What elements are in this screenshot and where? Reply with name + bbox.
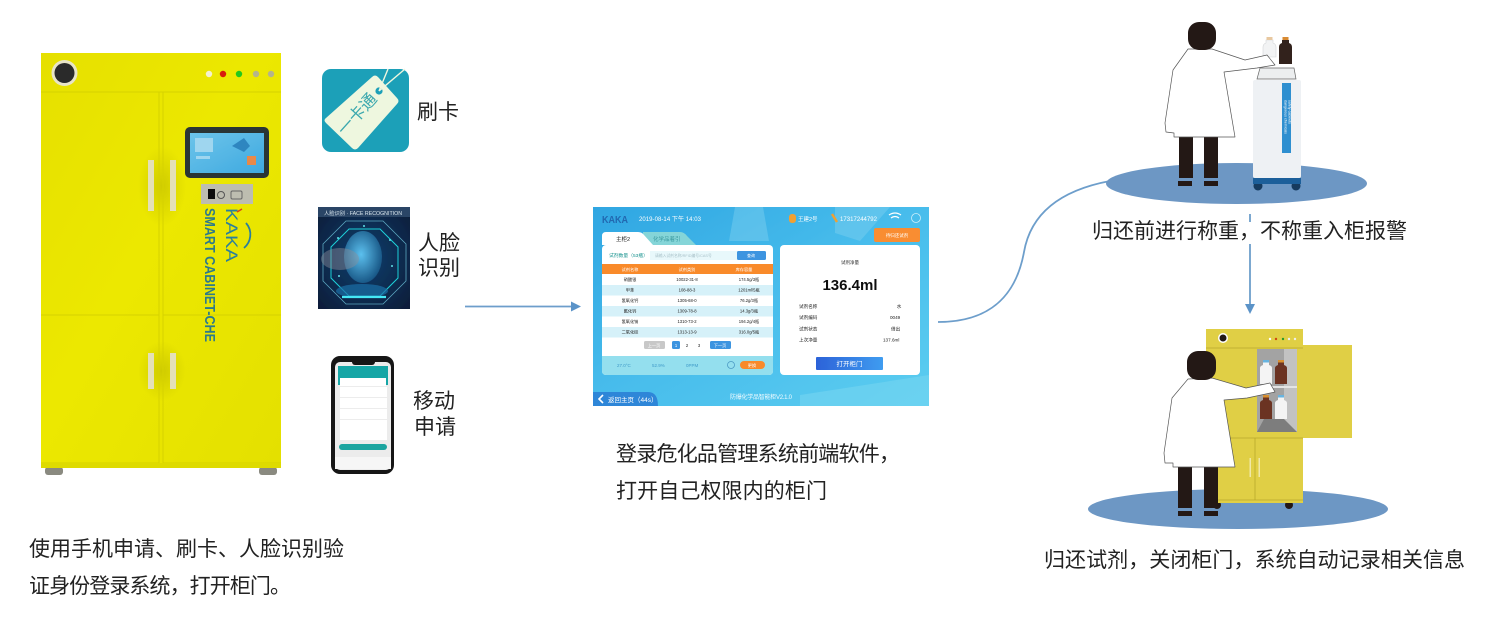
label: face recognition: 人脸 [418,232,460,255]
caption: step two [616,443,900,503]
reagent table panel: 14.3g/3瓶 [740,308,758,314]
label: mobile application [413,390,456,439]
reagent detail panel: 试剂净量 [841,259,859,266]
label: swipe card: 刷卡 [417,101,459,124]
header bar: 17317244792 [840,217,878,223]
reagent table panel: 查询 [747,252,755,258]
reagent table panel: 库存容量 [736,266,752,273]
icon: campus card tag [322,69,409,152]
icon: mobile phone app [331,356,394,474]
reagent table panel: 27.0°C [617,363,632,368]
reagent table panel: 0PPM [686,363,699,368]
caption: step four: 归还试剂，关闭柜门，系统自动记录相关信息 [1044,549,1465,572]
reagent table panel: 试剂数量（53瓶） [609,252,648,259]
reagent table panel: 下一页 [714,343,726,349]
back button [593,392,658,406]
weighing cabinet with scale [1253,37,1301,190]
yellow smart cabinet [41,53,281,475]
reagent table panel: 1310-73-2 [677,319,697,324]
reagent table panel: 甲苯 [626,286,635,294]
reagent table panel: 2 [686,343,689,348]
reagent table panel: 更换 [748,362,757,369]
reagent table panel: 试剂类别 [679,266,695,273]
reagent table panel: 1 [675,343,678,348]
label: mobile application: 移动 [413,390,455,413]
yellow smart cabinet: KAKA [222,208,241,263]
reagent table panel: 氢氧化钙 [622,297,639,304]
reagent table panel: 1201ml/5瓶 [738,286,760,294]
reagent detail panel: 137.6ml [883,338,899,342]
caption: step three: 归还前进行称重，不称重入柜报警 [1092,220,1407,243]
tabs: 主柜2 [616,235,630,243]
tabs [602,232,696,245]
label: face recognition: 识别 [418,257,460,280]
reagent table panel: 请输入试剂名称/RFID编号/CAS号 [655,253,712,258]
reagent table panel: 氟化钙 [624,308,637,314]
header bar: 2019-08-14 下午 14:03 [639,215,702,223]
caption: step one: 使用手机申请、刷卡、人脸识别验 [29,538,344,561]
tabs: 化学品着引 [653,235,681,243]
reagent table panel: 硝酸银 [624,276,637,283]
orange button [874,228,920,242]
reagent table panel: 1305-68-0 [677,298,697,303]
reagent table panel: 10022-31-8 [676,277,698,282]
caption: step one: 证身份登录系统，打开柜门。 [29,575,291,598]
caption: step one [29,538,344,598]
caption: step two: 登录危化品管理系统前端软件， [616,443,900,466]
reagent table panel: 二氧化硅 [622,328,639,336]
reagent table panel: 316.0g/5瓶 [739,328,759,336]
reagent table panel: 194.2g/4瓶 [739,318,759,325]
person returning bottle [1164,351,1275,516]
reagent table panel [602,245,773,375]
icon: face recognition [318,207,410,309]
reagent detail panel: 试剂名称 [799,303,818,310]
software version: 防爆化学品智能柜V2.1.0 [730,393,793,401]
person weighing bottle [1165,22,1275,186]
reagent detail panel [780,245,920,375]
reagent detail panel: 上次净量 [799,336,818,344]
arrow: to software [465,302,581,312]
reagent table panel: 上一页 [648,342,660,349]
reagent table panel: 174.5g/3瓶 [739,276,759,283]
reagent table panel: 76.2g/3瓶 [740,297,758,304]
reagent detail panel: 水 [897,303,902,309]
platform ellipse: storage [1088,489,1388,529]
header bar: KAKA [602,215,628,226]
software screen [593,207,929,406]
weighing cabinet with scale: safety cabinets [1288,100,1292,124]
reagent detail panel: 0049 [890,315,901,320]
reagent table panel: 52.9% [652,363,665,368]
orange button: 待归还试剂 [886,232,909,239]
reagent table panel: 3 [698,343,701,348]
reagent table panel: 108-88-3 [679,288,696,292]
reagent detail panel: 打开柜门 [836,359,862,368]
weighing cabinet with scale: dangerous chemicals [1284,100,1288,134]
reagent table panel: 氢氧化钠 [622,318,638,325]
arrow: down to storage [1245,214,1255,314]
caption: step two: 打开自己权限内的柜门 [616,480,827,503]
platform ellipse: weighing [1106,163,1367,204]
reagent detail panel: 试剂状态 [799,326,818,332]
reagent detail panel: 借出 [891,326,901,332]
arrow: curved connector [938,181,1110,322]
icon: face recognition: 人脸识别 · FACE RECOGNITION [324,209,402,217]
reagent detail panel: 试剂编码 [799,314,818,321]
yellow smart cabinet: SMART CABINET-CHE [201,208,218,342]
header bar: 王建2号 [798,215,818,223]
header bar [602,213,920,226]
label: face recognition [418,232,460,280]
reagent table panel: 1313-13-9 [677,330,697,334]
reagent detail panel: 136.4ml [822,277,878,294]
reagent table panel: 1309-78-8 [677,308,697,314]
icon: campus card tag: 一卡通 [334,89,381,139]
label: mobile application: 申请 [414,416,456,439]
back button: 返回主页（44s） [608,395,657,404]
reagent table panel: 试剂名称 [622,266,638,273]
storage cabinet with open door [1206,329,1352,509]
